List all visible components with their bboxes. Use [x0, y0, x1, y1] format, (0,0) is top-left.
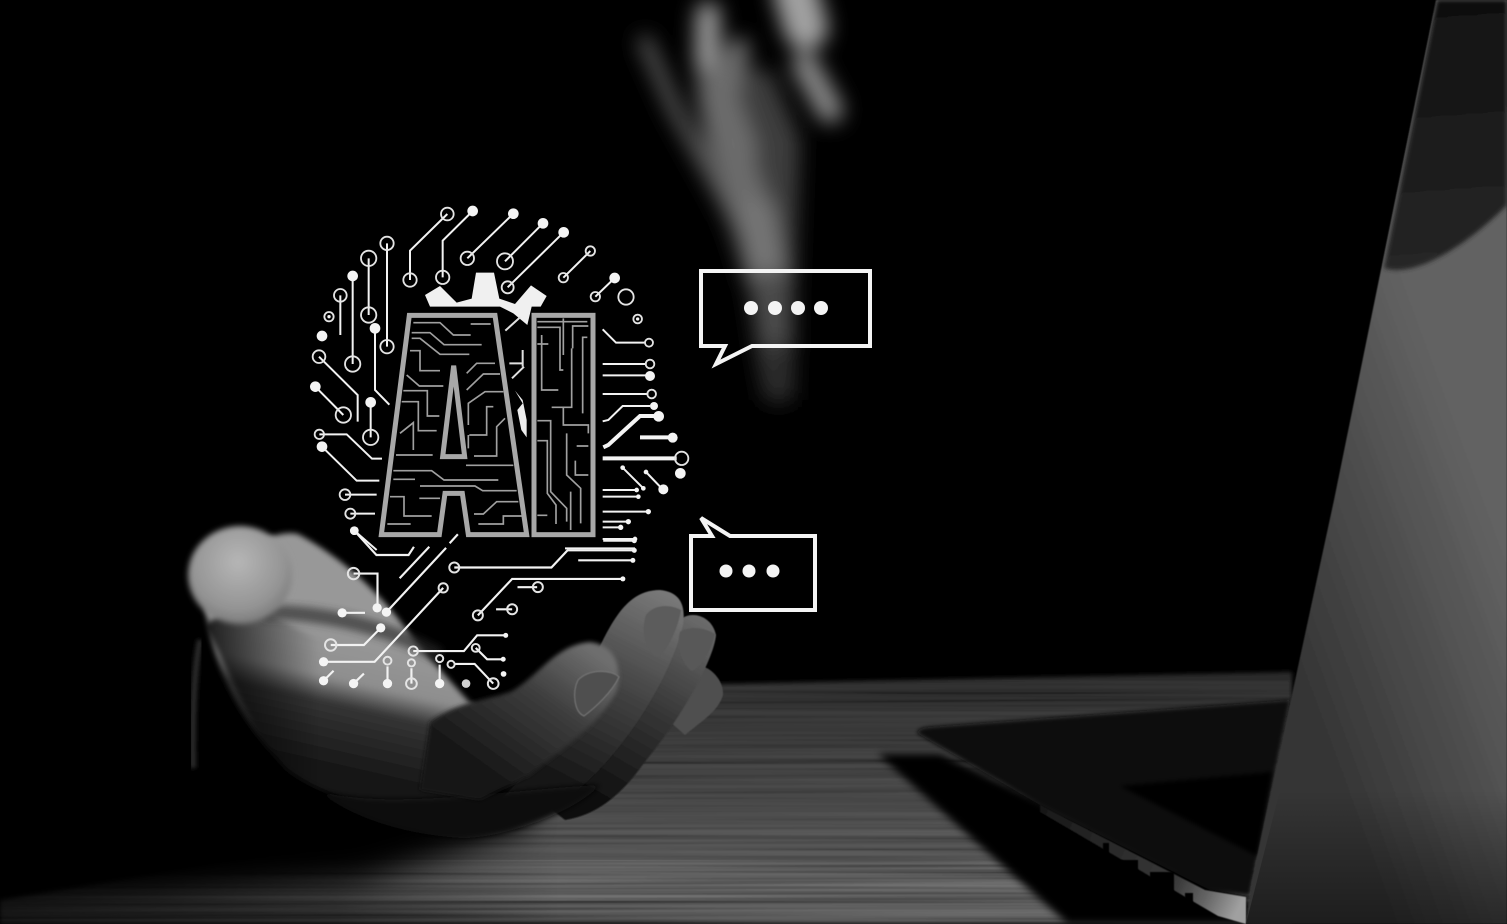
nail: ring	[679, 628, 715, 671]
lower palm shadow	[320, 785, 600, 838]
laptop shadow on table	[878, 754, 1250, 924]
gear fragments	[505, 317, 524, 378]
lower circuit	[319, 526, 637, 689]
palm crease	[262, 612, 440, 656]
base top surface	[917, 700, 1290, 896]
ring finger	[540, 615, 716, 820]
thumb	[188, 526, 292, 624]
top left traces	[310, 206, 642, 550]
nail: middle	[644, 606, 681, 657]
laptop lid	[1246, 0, 1507, 924]
table	[0, 660, 1292, 924]
gear	[425, 273, 547, 325]
upper circuit and AI letters	[310, 206, 688, 550]
keyboard	[1120, 772, 1272, 856]
hand	[188, 526, 723, 838]
silver front edge	[1040, 805, 1246, 924]
shirt and tie blur	[645, 0, 830, 400]
speech bubble: three dots	[691, 518, 815, 610]
gear lower shard	[515, 391, 527, 437]
palm left shade	[205, 600, 320, 800]
pinky finger	[668, 665, 723, 735]
letter I	[534, 315, 593, 535]
index finger	[420, 642, 619, 800]
nail: index	[575, 671, 619, 716]
palm	[205, 533, 494, 810]
right traces	[565, 329, 688, 548]
middle finger	[500, 590, 684, 800]
laptop base	[917, 700, 1290, 924]
speech bubble: four dots	[701, 271, 870, 364]
ports	[1103, 843, 1193, 910]
sleeve edge	[193, 640, 200, 768]
letter A	[381, 315, 527, 535]
